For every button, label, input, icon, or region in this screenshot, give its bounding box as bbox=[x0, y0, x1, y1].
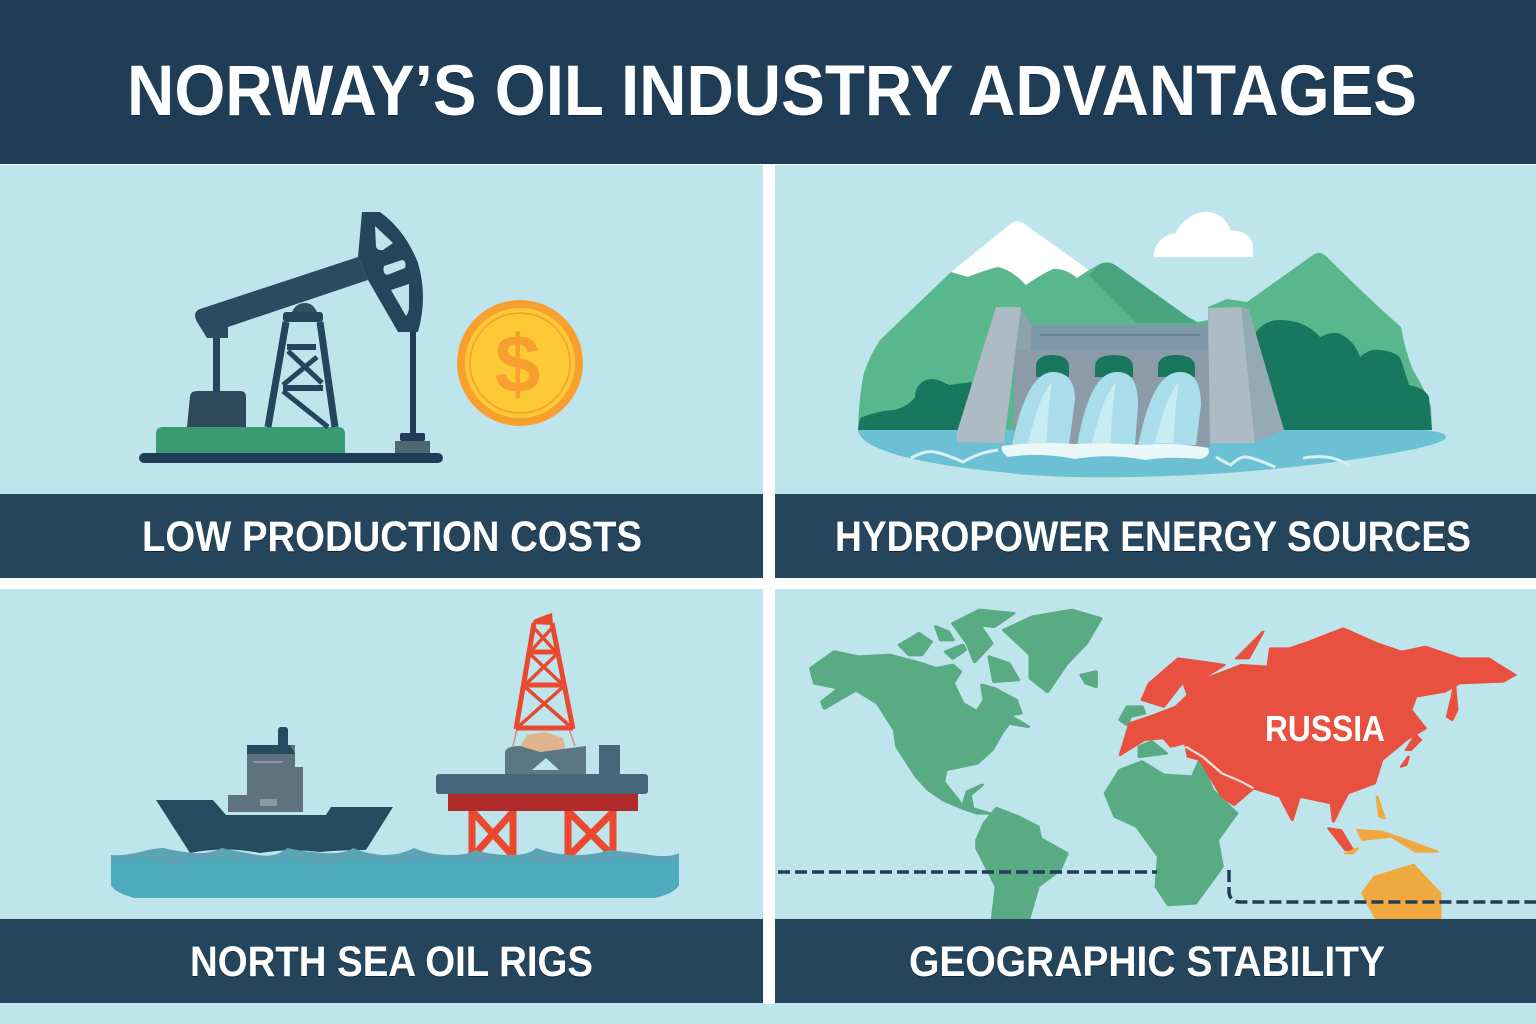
header: title bar bbox=[0, 0, 1536, 164]
label bar: low production costs: LOW PRODUCTION COSTS bbox=[142, 513, 642, 561]
green continents bbox=[811, 610, 1236, 920]
orange landmass: Australasia bbox=[1346, 797, 1440, 920]
panel: north sea oil rigs bbox=[0, 589, 763, 1004]
label bar: geographic stability: GEOGRAPHIC STABILITY bbox=[909, 938, 1385, 986]
panel: low production costs bbox=[0, 165, 763, 578]
icon: oil pump jack bbox=[139, 212, 443, 463]
label bar: low production costs bbox=[0, 494, 763, 578]
map label: Russia: RUSSIA bbox=[1265, 708, 1385, 749]
panel: geographic stability bbox=[775, 589, 1536, 1004]
dashed sea route bbox=[778, 870, 1536, 902]
icon: ship bbox=[156, 727, 393, 853]
waterfalls bbox=[1012, 372, 1201, 445]
icon: dollar coin: $ bbox=[495, 319, 540, 410]
icon: cloud bbox=[1154, 212, 1253, 257]
title: NORWAY’S OIL INDUSTRY ADVANTAGES bbox=[127, 52, 1417, 131]
panel: hydropower energy sources bbox=[775, 165, 1536, 578]
water bbox=[858, 430, 1446, 477]
illustration: mountains and dam bbox=[858, 221, 1446, 477]
foam bbox=[1002, 443, 1209, 460]
label bar: north sea oil rigs: NORTH SEA OIL RIGS bbox=[190, 938, 593, 986]
world map bbox=[811, 610, 1515, 920]
sea waves bbox=[111, 848, 679, 898]
label bar: geographic stability bbox=[775, 919, 1536, 1003]
icon: offshore oil rig bbox=[436, 613, 648, 857]
red landmass: Russia bbox=[1120, 628, 1515, 850]
icon: dollar coin bbox=[457, 300, 583, 426]
label bar: hydropower energy sources bbox=[775, 494, 1536, 578]
label bar: north sea oil rigs bbox=[0, 919, 763, 1003]
dam bbox=[957, 307, 1284, 447]
